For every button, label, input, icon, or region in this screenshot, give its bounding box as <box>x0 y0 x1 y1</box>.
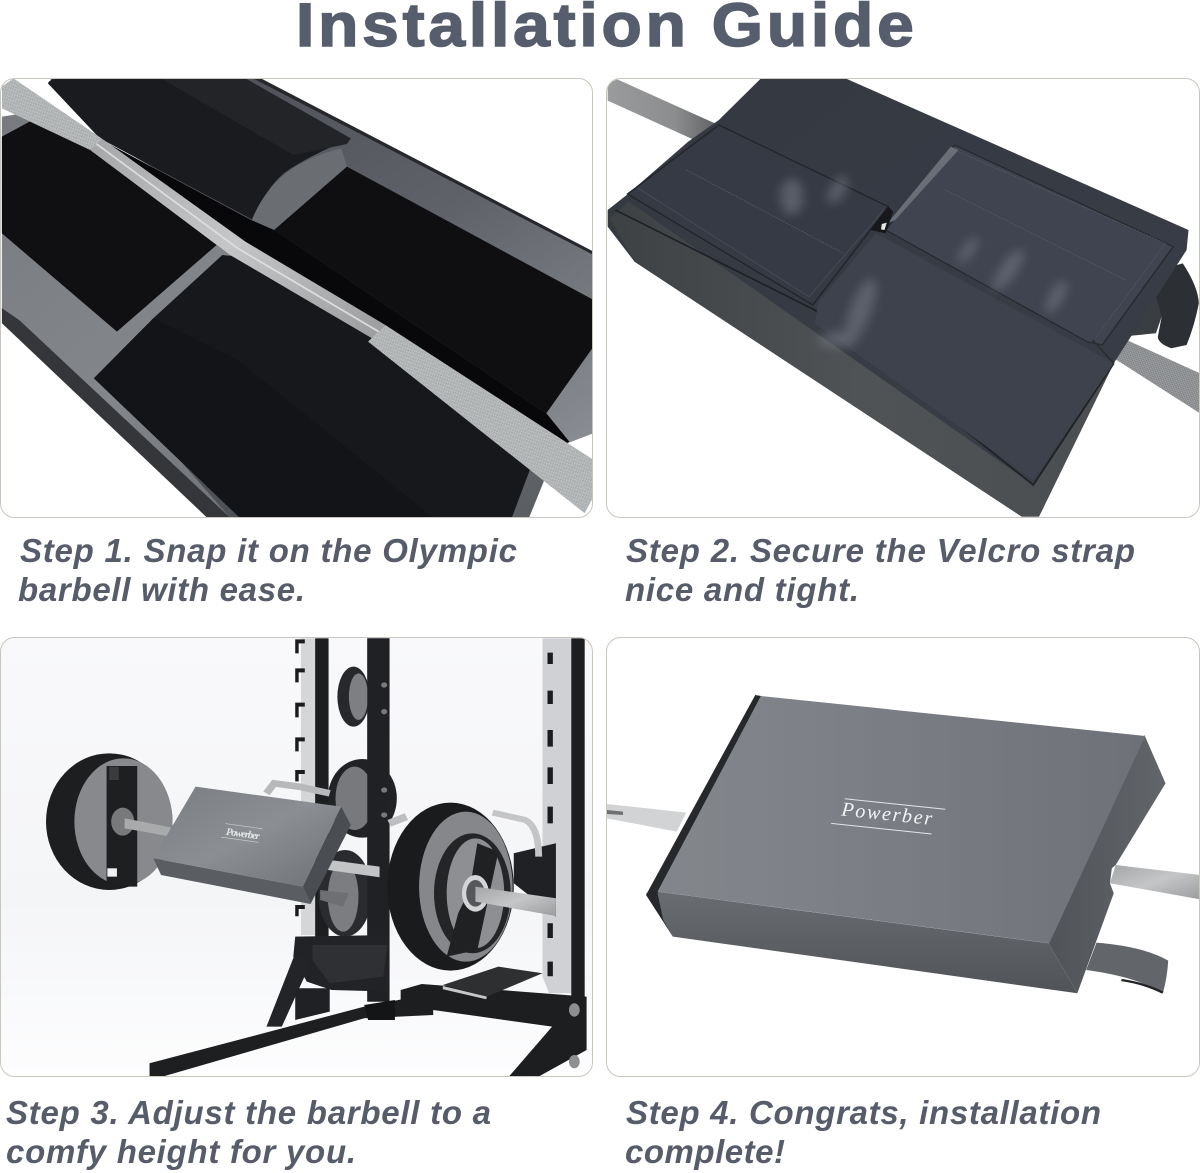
right flap <box>886 145 1173 345</box>
foot plate <box>443 967 543 997</box>
caption: step 3: Step 3. Adjust the barbell to a <box>6 1094 491 1131</box>
caption: step 2 <box>625 532 1135 608</box>
dark shadow under barbell <box>229 254 394 362</box>
caption: step 4: complete! <box>625 1133 785 1170</box>
panel: step 1 photo, velcro straps open around barbell <box>0 78 594 518</box>
right plate <box>387 803 514 971</box>
bar behind and right handle <box>328 860 380 877</box>
highlights <box>780 174 1071 348</box>
panel: step 3 photo, pad on rack with barbell <box>0 637 593 1078</box>
pad body <box>608 78 1189 517</box>
pad logo: Powerber <box>840 798 934 830</box>
pad side <box>610 202 1114 517</box>
caption: step 4 <box>625 1094 1101 1170</box>
pad top <box>658 696 1145 943</box>
caption: step 2: Step 2. Secure the Velcro strap <box>626 532 1135 569</box>
pad end <box>1049 735 1166 993</box>
barbell right <box>1110 865 1200 899</box>
right velcro <box>274 167 594 413</box>
barbell <box>2 78 102 150</box>
flap gap <box>870 207 893 233</box>
rack columns <box>295 638 585 1008</box>
caption: step 3: comfy height for you. <box>6 1133 356 1170</box>
pad logo: Powerber <box>225 827 261 843</box>
strap under pad <box>320 890 349 907</box>
panel: step 2 photo, velcro flaps on pad <box>606 78 1200 518</box>
lower left velcro <box>2 120 230 332</box>
big lower velcro <box>94 255 535 518</box>
back plates <box>337 667 370 727</box>
caption: step 2: nice and tight. <box>625 571 859 608</box>
caption: step 1 <box>18 532 517 608</box>
front panel <box>815 234 1114 447</box>
upper strap <box>48 78 351 220</box>
pad logo <box>831 798 945 835</box>
dark gap along barbell <box>94 140 569 453</box>
pad dark edge <box>646 695 761 937</box>
pad box <box>153 787 351 904</box>
caption: step 3 <box>6 1094 491 1170</box>
left plate <box>46 753 173 890</box>
barbell right <box>1116 340 1199 413</box>
strap <box>1086 943 1168 993</box>
pad logo <box>221 823 263 843</box>
left flap <box>628 125 888 305</box>
pad front <box>646 892 1077 993</box>
bar right end <box>475 887 556 916</box>
lower rack block <box>293 935 368 991</box>
caption: step 1: barbell with ease. <box>18 571 305 608</box>
base frame <box>150 993 433 1078</box>
barbell left <box>607 804 686 832</box>
strap right <box>1156 263 1199 348</box>
back handle <box>266 783 330 793</box>
caption: step 4: Step 4. Congrats, installation <box>626 1094 1101 1131</box>
pad: lower half <box>2 113 546 518</box>
panel: step 4 photo, finished pad on barbell <box>607 695 1199 994</box>
caption: step 1: Step 1. Snap it on the Olympic <box>20 532 517 569</box>
pad: upper half <box>50 78 594 443</box>
barbell left <box>608 79 719 141</box>
